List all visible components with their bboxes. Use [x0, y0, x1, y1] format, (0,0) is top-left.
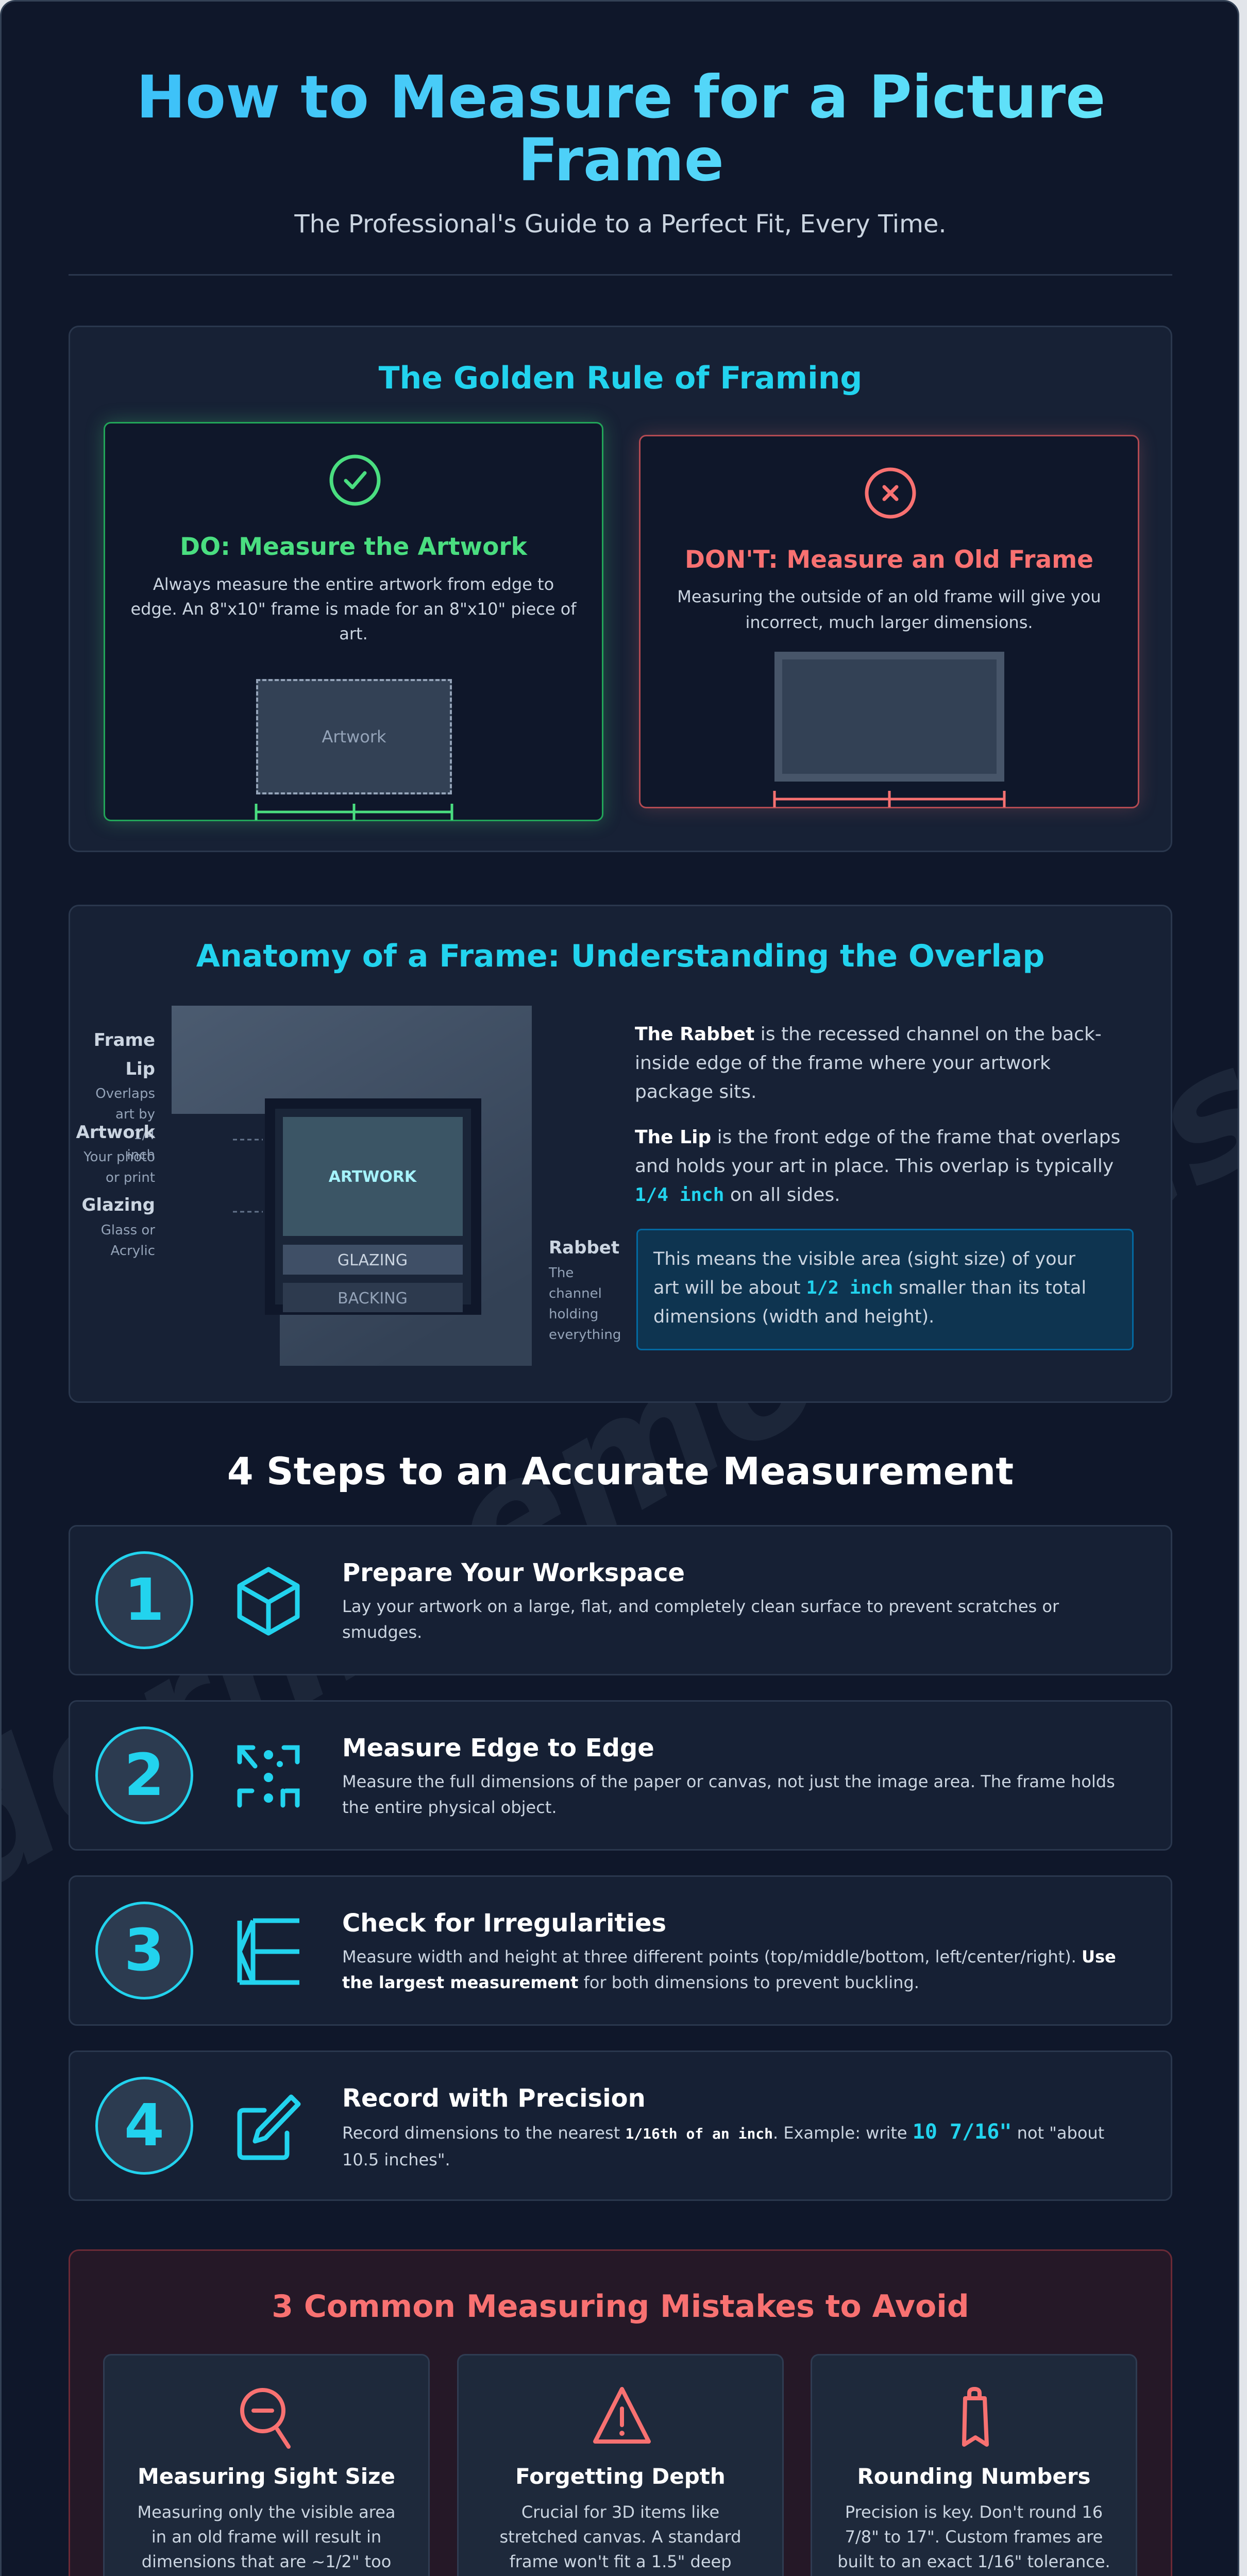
anatomy diagram: [76, 1006, 621, 1366]
anatomy text: [635, 1024, 1120, 1206]
left labels: or print: [106, 1170, 155, 1185]
title: [31, 66, 1211, 192]
step 4: 4: [124, 2092, 164, 2159]
left labels: Frame: [94, 1030, 155, 1050]
icon: scan: [237, 1745, 300, 1807]
step 1: 1: [124, 1567, 164, 1634]
rabbet label: Rabbet: [549, 1238, 619, 1258]
icon: tag: [962, 2387, 989, 2447]
rabbet label: The: [548, 1265, 574, 1281]
step 3: 3: [124, 1917, 164, 1984]
rabbet label: holding: [549, 1307, 598, 1322]
step 2: 2: [124, 1742, 164, 1809]
left labels: art by: [115, 1107, 155, 1122]
measure bar red: [773, 791, 1006, 807]
step 2: [69, 1700, 1172, 1851]
artwork box: [256, 679, 452, 794]
left labels: Overlaps: [95, 1086, 155, 1101]
icon: pencil: [237, 2095, 301, 2160]
step 4: Record dimensions to the nearest 1/16th of an inch. Example: write 10 7/16" not "about 10.5 inches".: [342, 2120, 1104, 2170]
artwork layer: [283, 1117, 463, 1236]
rabbet label: [548, 1238, 621, 1343]
left labels: [76, 1030, 156, 1259]
rabbet channel: [265, 1098, 481, 1315]
heading: mistakes: 3 Common Measuring Mistakes to Avoid: [272, 2289, 969, 2325]
left labels: Your photo: [83, 1149, 155, 1165]
artwork box: Artwork: [322, 727, 386, 747]
measure bar green: [255, 804, 453, 820]
step 1: [69, 1525, 1172, 1675]
step 2: Measure Edge to Edge: [342, 1734, 654, 1762]
glazing layer: [283, 1245, 463, 1275]
rabbet label: channel: [549, 1286, 602, 1301]
DO card: [104, 422, 603, 821]
DONT text: Measuring the outside of an old frame will give you incorrect, much larger dimensions.: [677, 587, 1101, 632]
title: How to Measure for a Picture: [136, 63, 1106, 131]
anatomy text: The Lip is the front edge of the frame that overlaps and holds your art in place. This overlap is typically 1/4 inch on all sides.: [635, 1127, 1120, 1206]
old frame: [774, 652, 1004, 782]
step 2: Measure the full dimensions of the paper or canvas, not just the image area. The frame holds the entire physical object.: [342, 1772, 1115, 1817]
icon: zoom out: [240, 2388, 291, 2449]
mistake 1: Measuring Sight Size: [138, 2464, 395, 2489]
glazing layer: GLAZING: [338, 1251, 408, 1269]
frame profile: [172, 1006, 532, 1366]
mistake 3: [811, 2354, 1137, 2576]
anatomy text: The Rabbet is the recessed channel on the back-inside edge of the frame where your artwork package sits.: [635, 1024, 1102, 1103]
step 3: Check for Irregularities: [342, 1909, 666, 1938]
left labels: Glass or: [101, 1223, 155, 1238]
rabbet label: everything: [549, 1327, 621, 1343]
heading: golden rule: The Golden Rule of Framing: [379, 360, 862, 396]
icon: warning: [593, 2387, 651, 2444]
DO heading: DO: Measure the Artwork: [180, 533, 527, 561]
subtitle: The Professional's Guide to a Perfect Fit, Every Time.: [294, 210, 947, 239]
icon: cube: [237, 1567, 300, 1635]
icon: x: [865, 468, 916, 518]
DO text: Always measure the entire artwork from edge to edge. An 8"x10" frame is made for an 8"x10" piece of art.: [130, 574, 577, 643]
panel: anatomy: [69, 905, 1172, 1403]
panel: golden rule: [69, 326, 1172, 852]
mistake 3: Precision is key. Don't round 16 7/8" to 17". Custom frames are built to an exact 1/16" tolerance.: [837, 2502, 1110, 2571]
heading: anatomy: Anatomy of a Frame: Understanding the Overlap: [196, 938, 1044, 974]
step 1: Prepare Your Workspace: [342, 1558, 685, 1587]
backing layer: [283, 1283, 463, 1312]
panel: mistakes: [69, 2249, 1172, 2576]
step 1: Lay your artwork on a large, flat, and completely clean surface to prevent scratches or smudges.: [342, 1597, 1059, 1642]
title: Frame: [518, 126, 724, 194]
backing layer: BACKING: [338, 1290, 408, 1308]
left labels: Artwork: [76, 1122, 156, 1143]
left labels: Acrylic: [111, 1243, 155, 1259]
step 4: Record with Precision: [342, 2084, 646, 2113]
DONT heading: DON'T: Measure an Old Frame: [685, 546, 1093, 574]
DONT card: [639, 435, 1139, 808]
callout: sight size: [636, 1229, 1134, 1350]
artwork layer: ARTWORK: [329, 1168, 417, 1186]
step 3: [69, 1875, 1172, 2026]
icon: irregularities: [237, 1919, 299, 1985]
step 3: Measure width and height at three different points (top/middle/bottom, left/center/right). Use the largest measurement for both dimensions to prevent buckling.: [342, 1947, 1116, 1992]
mistake 1: [103, 2354, 430, 2576]
left labels: Lip: [125, 1059, 155, 1079]
mistake 2: Forgetting Depth: [515, 2464, 726, 2489]
heading: 4 steps: 4 Steps to an Accurate Measurement: [227, 1450, 1014, 1494]
left labels: Glazing: [81, 1195, 155, 1215]
mistake 3: Rounding Numbers: [857, 2464, 1091, 2489]
step 4: [69, 2050, 1172, 2201]
left labels: inch: [127, 1147, 155, 1163]
icon: check: [330, 454, 380, 506]
callout: sight size: This means the visible area (sight size) of your art will be about 1/2 inch smaller than its total dimensions (width and height).: [653, 1249, 1086, 1327]
mistake 2: [457, 2354, 784, 2576]
left labels: 1/4: [133, 1127, 155, 1143]
